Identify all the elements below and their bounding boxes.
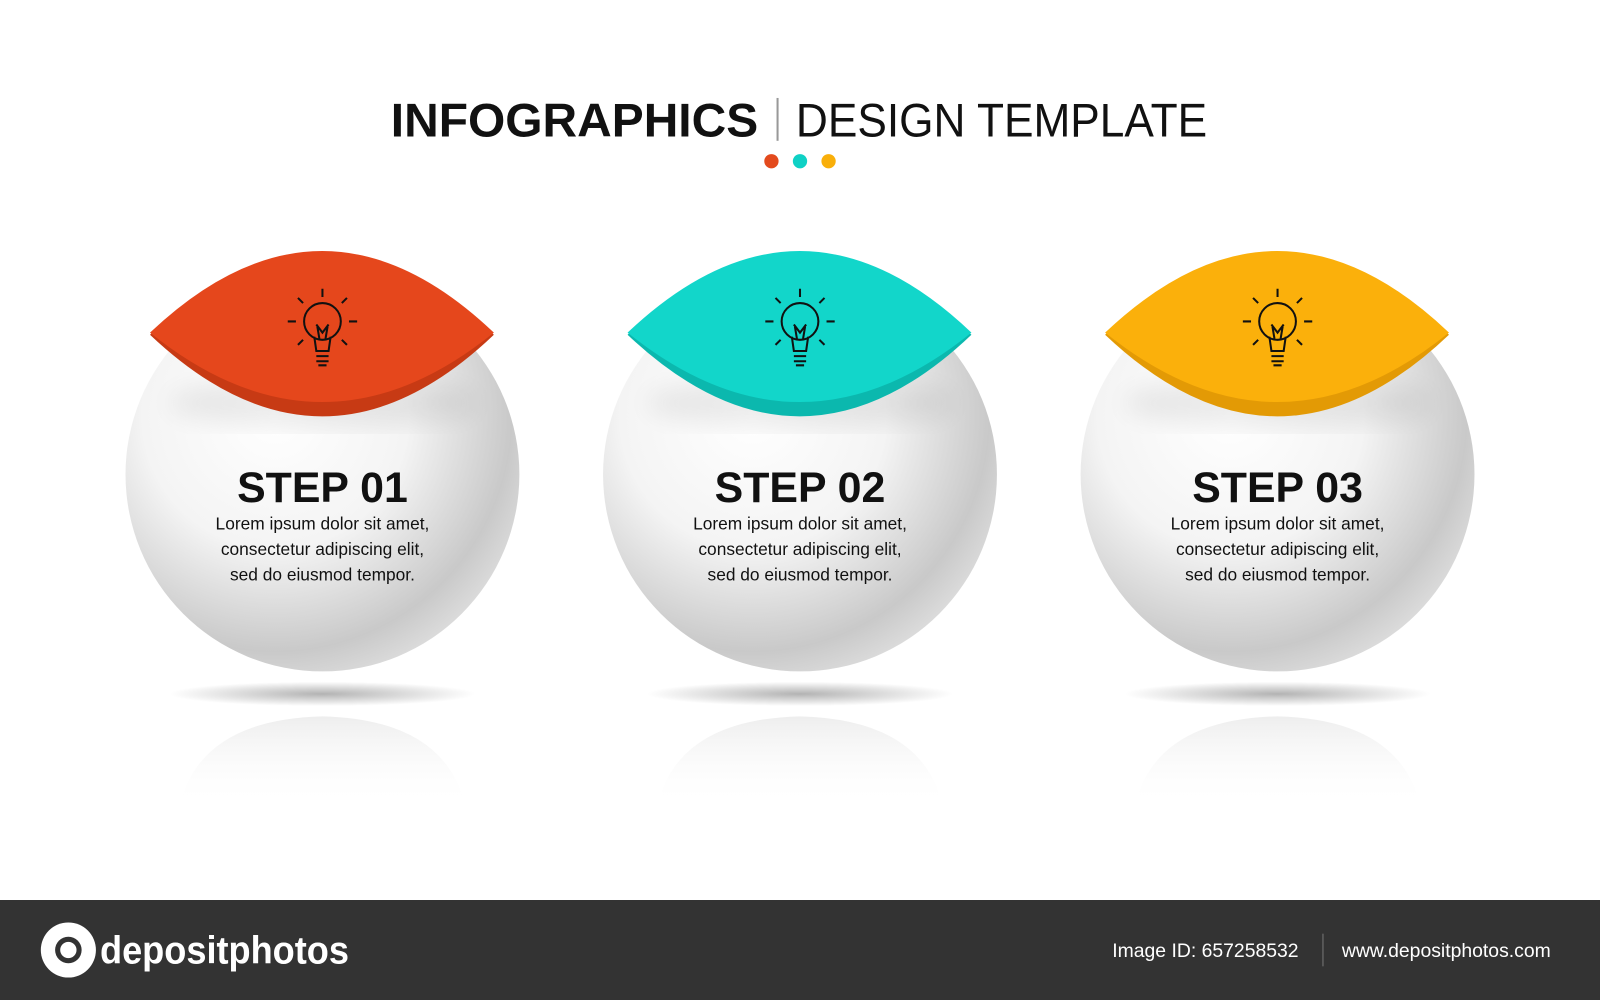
- shadow: [647, 682, 953, 706]
- reflection: [657, 716, 943, 806]
- text: STEP 03: [1192, 464, 1363, 512]
- text: sed do eiusmod tempor.: [230, 565, 415, 585]
- leaf header: [150, 251, 494, 416]
- text: consectetur adipiscing elit,: [221, 539, 424, 559]
- shadow: [169, 682, 476, 706]
- step 2: [603, 251, 997, 806]
- text: [216, 464, 429, 585]
- title: INFOGRAPHICS: [391, 95, 758, 147]
- sphere: [1081, 278, 1474, 671]
- title: [391, 95, 1207, 147]
- icon: bulb: [1243, 289, 1312, 365]
- text: consectetur adipiscing elit,: [698, 539, 902, 559]
- image id: Image ID: 657258532: [1112, 940, 1299, 962]
- reflection: [1135, 716, 1420, 806]
- logo: [41, 922, 349, 978]
- logo: depositphotos: [100, 929, 349, 972]
- text: sed do eiusmod tempor.: [1185, 565, 1370, 585]
- sphere: [603, 278, 997, 671]
- leaf header: [1105, 251, 1449, 416]
- text: STEP 02: [715, 464, 885, 512]
- dots: [764, 154, 836, 168]
- text: Lorem ipsum dolor sit amet,: [693, 514, 907, 534]
- text: sed do eiusmod tempor.: [708, 565, 892, 585]
- footer bar: [0, 900, 1600, 1000]
- text: STEP 01: [237, 464, 408, 512]
- text: [1171, 464, 1384, 585]
- icon: bulb: [288, 289, 357, 365]
- step 3: [1081, 251, 1474, 806]
- text: Lorem ipsum dolor sit amet,: [216, 514, 429, 534]
- text: Lorem ipsum dolor sit amet,: [1171, 514, 1384, 534]
- step 1: [126, 251, 519, 806]
- text: [693, 464, 907, 585]
- leaf header: [628, 251, 971, 416]
- reflection: [180, 716, 465, 806]
- shadow: [1124, 682, 1431, 706]
- sphere: [126, 278, 519, 671]
- title: DESIGN TEMPLATE: [796, 95, 1207, 147]
- icon: bulb: [765, 289, 835, 365]
- website: www.depositphotos.com: [1341, 940, 1551, 962]
- text: consectetur adipiscing elit,: [1176, 539, 1379, 559]
